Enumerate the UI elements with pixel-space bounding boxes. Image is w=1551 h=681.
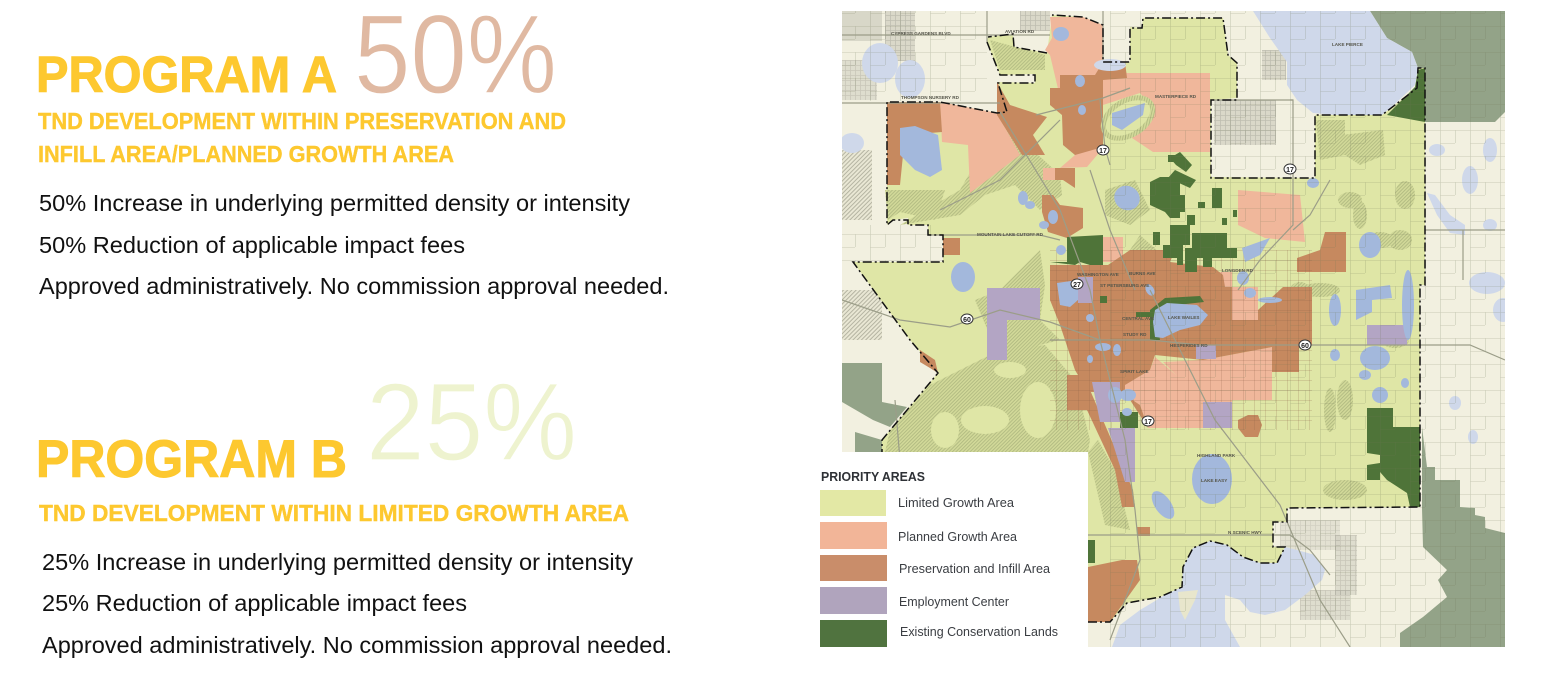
map labels: LONGDEN RD bbox=[1222, 268, 1254, 273]
map labels: BURNS AVE bbox=[1129, 271, 1156, 276]
program A benefits: Approved administratively. No commission approval needed. bbox=[39, 273, 669, 299]
employment centers bbox=[987, 277, 1407, 482]
county boundary bbox=[853, 15, 1425, 622]
highway shields: 27 bbox=[1073, 282, 1081, 289]
legend item: preservation and infill: Preservation and Infill Area bbox=[899, 562, 1050, 576]
map labels: THOMPSON NURSERY RD bbox=[901, 95, 960, 100]
program A heading bbox=[36, 0, 557, 117]
map labels: CENTRAL AVE bbox=[1122, 316, 1154, 321]
program A benefits: 50% Reduction of applicable impact fees bbox=[39, 232, 465, 258]
map labels: WASHINGTON AVE bbox=[1077, 272, 1119, 277]
highway shields: 60 bbox=[1301, 343, 1309, 350]
map labels: LAKE EASY bbox=[1201, 478, 1227, 483]
map: priority areas bbox=[840, 11, 1513, 660]
hatched wetlands bbox=[885, 40, 1415, 530]
program B subheading: TND DEVELOPMENT WITHIN LIMITED GROWTH AREA bbox=[39, 500, 629, 526]
roads bbox=[842, 11, 1505, 647]
map labels: LAKE WAILES bbox=[1168, 315, 1199, 320]
program B heading bbox=[36, 361, 577, 489]
legend item: planned growth: Planned Growth Area bbox=[898, 530, 1017, 544]
planned growth areas bbox=[940, 17, 1305, 428]
water: southern lake bbox=[1112, 541, 1325, 647]
map labels: AVIATION RD bbox=[1005, 29, 1035, 34]
lakes east of county bbox=[1427, 138, 1513, 444]
water: Lake Pierce bbox=[1253, 11, 1418, 115]
heading: PROGRAM A: PROGRAM A bbox=[36, 46, 337, 103]
program A subheading: TND DEVELOPMENT WITHIN PRESERVATION AND bbox=[38, 108, 566, 134]
map labels: MOUNTAIN LAKE CUTOFF RD bbox=[977, 232, 1044, 237]
map labels: N SCENIC HWY bbox=[1228, 530, 1262, 535]
program B benefits: 25% Reduction of applicable impact fees bbox=[42, 590, 467, 616]
map labels: SPIRIT LAKE bbox=[1120, 369, 1149, 374]
map labels: ST PETERSBURG AVE bbox=[1100, 283, 1149, 288]
legend item: preservation and infill bbox=[820, 555, 1050, 581]
program A benefits: 50% Increase in underlying permitted density or intensity bbox=[39, 190, 631, 216]
urban subdivisions outside county area bbox=[842, 11, 1357, 620]
existing conservation lands bbox=[1050, 68, 1425, 563]
road grid east and south bbox=[842, 11, 1505, 647]
fine street grid in town centers bbox=[1050, 250, 1312, 430]
program A subheading bbox=[38, 108, 566, 167]
map labels: MASTERPIECE RD bbox=[1155, 94, 1197, 99]
light clearings in wetlands bbox=[931, 362, 1056, 448]
island bbox=[1178, 590, 1198, 620]
highway shields: 60 bbox=[963, 317, 971, 324]
program B benefits bbox=[42, 549, 672, 658]
hatched ring around lake bbox=[1100, 95, 1156, 141]
highway shields: 17 bbox=[1099, 148, 1107, 155]
legend item: conservation lands: Existing Conservation Lands bbox=[900, 625, 1058, 639]
legend title: PRIORITY AREAS bbox=[821, 470, 925, 484]
legend item: limited growth bbox=[820, 490, 1014, 516]
map labels: HIGHLAND PARK bbox=[1197, 453, 1236, 458]
map labels bbox=[891, 29, 1363, 535]
big number: 25%: 25% bbox=[366, 361, 577, 484]
heading: PROGRAM B: PROGRAM B bbox=[36, 430, 347, 489]
legend bbox=[800, 452, 1088, 667]
map labels: STUDY RD bbox=[1123, 332, 1147, 337]
legend item: conservation lands bbox=[820, 620, 1058, 647]
program A benefits bbox=[39, 190, 669, 299]
county limited growth area bbox=[853, 15, 1425, 660]
preservation and infill areas bbox=[887, 62, 1346, 622]
highway shields bbox=[961, 145, 1311, 426]
map labels: CYPRESS GARDENS BLVD bbox=[891, 31, 951, 36]
legend item: employment center bbox=[820, 587, 1009, 614]
legend item: employment center: Employment Center bbox=[899, 595, 1009, 609]
highway shields: 17 bbox=[1144, 419, 1152, 426]
program B benefits: Approved administratively. No commission approval needed. bbox=[42, 632, 672, 658]
map labels: HESPERIDES RD bbox=[1170, 343, 1208, 348]
program B benefits: 25% Increase in underlying permitted density or intensity bbox=[42, 549, 634, 575]
highway shields: 17 bbox=[1286, 167, 1294, 174]
legend item: planned growth bbox=[820, 522, 1017, 549]
program A subheading: INFILL AREA/PLANNED GROWTH AREA bbox=[38, 141, 454, 167]
legend item: limited growth: Limited Growth Area bbox=[898, 496, 1014, 510]
protected lands bbox=[842, 11, 1505, 647]
lakes bbox=[840, 27, 1414, 523]
map labels: LAKE PIERCE bbox=[1332, 42, 1363, 47]
